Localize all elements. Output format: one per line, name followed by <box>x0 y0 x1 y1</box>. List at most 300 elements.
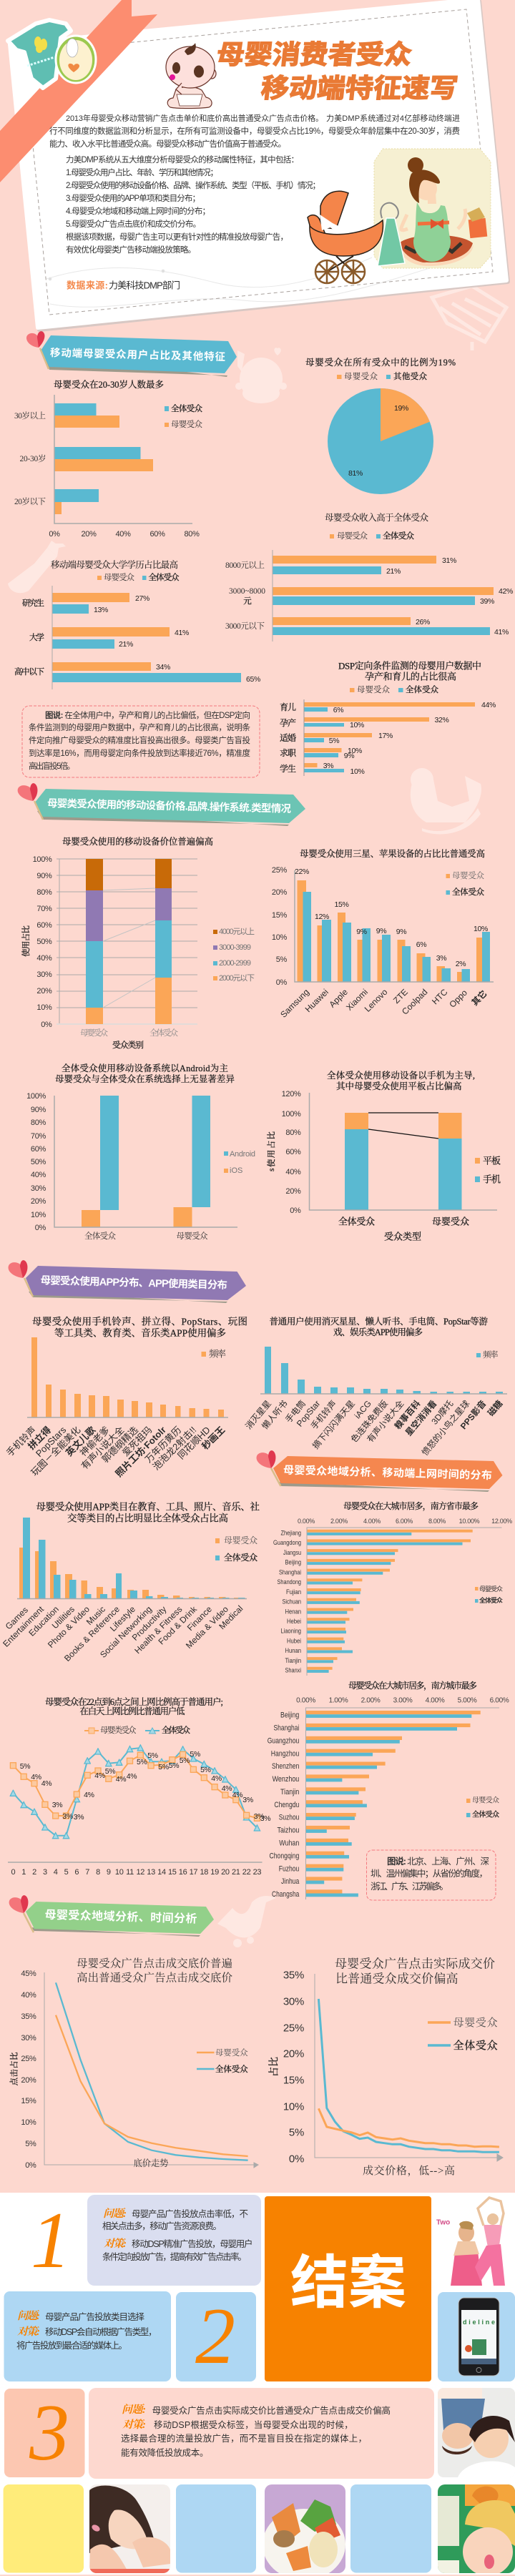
tile: problem 1: 母婴产品广告投放点击率低，不 <box>132 2208 248 2219</box>
y ticks: 40% <box>285 1168 301 1176</box>
y ticks: 0% <box>41 1021 52 1029</box>
data source: 力美科技DMP部门 <box>109 280 180 290</box>
intro text: 2.母婴受众使用的移动设备价格、品牌、操作系统、类型（平板、手机）情况； <box>66 180 320 190</box>
province labels: Guangdong <box>273 1539 301 1547</box>
callout: DSP note: 条件监测到的母婴用户数据中，孕产和育儿的占比很高，说明条 <box>29 722 250 732</box>
legend: 3000-3999 <box>219 943 251 952</box>
chart title <box>269 1316 488 1337</box>
value labels <box>94 594 260 684</box>
intro text: 3.母婴受众使用的APP单项和类目分布； <box>66 193 200 203</box>
tile: result: 结案 <box>290 2251 406 2316</box>
tile: numeral 3 <box>4 2389 84 2477</box>
value labels: 65% <box>246 675 260 684</box>
chart title: 母婴受众使用三星、苹果设备的占比比普通受高 <box>300 848 485 859</box>
chart title: 母婴受众在大城市居多，南方省市最多 <box>343 1500 479 1511</box>
value labels: 10% <box>348 747 362 755</box>
app labels: 有声小说大全 <box>365 1398 406 1445</box>
y ticks: 25% <box>283 2022 304 2034</box>
axis ticks: 10.00% <box>459 1518 480 1525</box>
hour labels <box>11 1868 261 1877</box>
legend: 母婴受众 <box>453 2017 498 2029</box>
axis ticks: 0% <box>49 530 60 539</box>
y ticks: 15% <box>283 2074 304 2087</box>
axes and arrow <box>44 1972 258 2168</box>
value labels: 4% <box>84 1791 94 1799</box>
y ticks: 20% <box>272 888 288 897</box>
category labels: 学生 <box>280 763 296 774</box>
legend: 母婴受众 <box>472 1795 499 1805</box>
banner text: 母婴受众地域分析、移动端上网时间的分布 <box>283 1464 492 1482</box>
category labels: 元 <box>243 596 252 606</box>
chart title: 母婴受众与全体受众在系统选择上无显著差异 <box>55 1073 235 1084</box>
y ticks: 40% <box>31 1171 46 1179</box>
axis ticks <box>296 1696 509 1705</box>
y ticks: 90% <box>31 1106 46 1114</box>
series lines <box>368 1113 438 1139</box>
value labels: 3% <box>260 1814 270 1823</box>
category labels: Media & Video <box>184 1604 230 1651</box>
illustration: mother panel <box>374 149 491 268</box>
x labels: 母婴受众 <box>80 1028 109 1038</box>
x labels: 全体受众 <box>84 1231 116 1241</box>
tile: result <box>265 2196 431 2381</box>
legend: 母婴受众 <box>104 572 134 582</box>
value labels: 9% <box>376 927 386 935</box>
axis ticks: 4.00% <box>426 1696 445 1705</box>
chart title <box>338 661 481 682</box>
x labels: 受众类型 <box>384 1232 421 1242</box>
chart title <box>55 1063 235 1084</box>
tile: problem 2: 问题: <box>17 2310 40 2322</box>
app labels: PopStars <box>34 1424 69 1459</box>
axis <box>272 550 273 641</box>
axis ticks: 6.00% <box>396 1518 413 1525</box>
conclusion section background <box>0 2193 515 2575</box>
tile: numeral 2 <box>176 2292 256 2381</box>
axis <box>27 1417 228 1418</box>
app labels: 神偷老爹 <box>78 1425 112 1458</box>
legend: 母婴类受众 <box>100 1725 137 1735</box>
intro text: 有效优化母婴类广告移动端投放策略。 <box>66 245 196 255</box>
axes <box>309 1093 497 1210</box>
city labels: Taizhou <box>278 1827 299 1835</box>
y ticks: 0% <box>35 1224 46 1232</box>
legend: 全体受众 <box>149 572 180 582</box>
chart: floor price <box>9 1957 258 2170</box>
legend <box>213 927 255 983</box>
hour labels: 12 <box>136 1868 144 1877</box>
y ticks: 100% <box>282 1110 301 1119</box>
x axis title: 底价走势 <box>133 2158 169 2168</box>
axis ticks: 20% <box>81 530 97 539</box>
legend: 2000元以下 <box>219 974 255 983</box>
axis ticks: 3.00% <box>393 1696 413 1705</box>
hour labels: 5 <box>64 1868 69 1877</box>
city labels: Wuhan <box>279 1839 299 1848</box>
category labels: Medical <box>217 1603 245 1631</box>
intro text: 5.母婴受众广告点击底价和成交价分布。 <box>66 219 201 229</box>
city labels: Hangzhou <box>271 1749 299 1758</box>
chart: pie share <box>305 357 456 494</box>
category labels: 孕产 <box>280 717 296 728</box>
chart: device price stacked <box>21 836 255 1050</box>
value labels: 13% <box>94 606 108 614</box>
legend: iOS <box>230 1166 242 1175</box>
axes and arrow <box>315 1974 503 2161</box>
tile: problem 2 <box>4 2291 171 2381</box>
app labels: 摘下闪闪满天星 <box>310 1398 357 1451</box>
x labels <box>80 1028 179 1050</box>
city labels <box>268 1711 300 1899</box>
category labels: Lifestyle <box>108 1604 137 1633</box>
section banner 4 <box>257 1450 502 1492</box>
hour labels: 11 <box>126 1868 134 1877</box>
icon: heart pin <box>9 1260 33 1297</box>
legend <box>476 1350 499 1360</box>
hour labels: 19 <box>210 1868 219 1877</box>
banner text: 母婴类受众使用的移动设备价格.品牌.操作系统.类型情况 <box>47 797 292 815</box>
chart title: 母婴受众在22点到6点之间上网比例高于普通用户; <box>45 1696 223 1707</box>
banner shape <box>41 335 237 373</box>
main title <box>215 39 459 103</box>
value labels: 34% <box>156 663 170 672</box>
y ticks: 20% <box>21 2076 36 2085</box>
axis ticks: 4.00% <box>363 1518 381 1525</box>
y ticks: 60% <box>36 921 52 930</box>
value labels: 6% <box>333 706 343 714</box>
legend: 平板 <box>483 1156 501 1166</box>
app labels: 郭德纲精选 <box>99 1425 140 1465</box>
banner shadow <box>278 1482 489 1492</box>
y ticks: 20% <box>285 1187 301 1196</box>
legend <box>350 684 439 694</box>
legend: 全体受众 <box>171 403 203 413</box>
legend <box>84 1725 190 1735</box>
city labels: Chongqing <box>269 1852 299 1860</box>
y ticks: 10% <box>272 933 288 942</box>
value labels: 5% <box>158 1763 169 1771</box>
bars <box>82 1096 210 1227</box>
chart: device type <box>266 1070 501 1242</box>
province labels: Sichuan <box>282 1598 301 1606</box>
axis ticks: 0.00% <box>298 1518 315 1525</box>
photo: food plate <box>263 2484 345 2576</box>
value labels: 27% <box>135 594 149 603</box>
province labels: Zhejiang <box>280 1529 301 1538</box>
chart title <box>32 1316 247 1339</box>
tile: yellow <box>4 2484 84 2573</box>
chart title: 普通用户使用消灭星星、懒人听书、手电筒、PopStar等游 <box>269 1316 488 1327</box>
city labels: Chengdu <box>274 1801 299 1809</box>
x labels: 母婴受众 <box>432 1216 469 1227</box>
chart title <box>335 1957 495 1985</box>
intro text: 能力、收入水平比普通受众高。母婴受众移动广告价值高于普通受众。 <box>49 139 286 149</box>
y ticks: 100% <box>26 1092 46 1101</box>
icon: heart pin <box>26 331 49 369</box>
bars <box>31 1337 224 1417</box>
dashed border <box>31 9 493 315</box>
value labels: 5% <box>169 1761 179 1770</box>
value labels: 26% <box>416 618 430 626</box>
app labels: 照片工坊·Fotolr <box>113 1425 168 1479</box>
value labels: 3% <box>52 1801 62 1809</box>
category labels: 8000元以上 <box>225 560 265 570</box>
category labels: Food & Drink <box>157 1603 200 1646</box>
x labels: Huawei <box>303 987 330 1014</box>
y ticks <box>21 1970 36 2170</box>
section banner 3 <box>9 1260 246 1303</box>
tile: problem 1: 条件定向投放广告，提高有效广告点击率。 <box>102 2251 247 2262</box>
legend: 全体受众 <box>472 1809 499 1819</box>
chart title: 母婴受众在20-30岁人数最多 <box>54 379 164 390</box>
chart: app categories <box>1 1500 260 1663</box>
category labels: Music <box>84 1604 107 1627</box>
bars <box>304 702 475 772</box>
callout: region note: 浙江、广东、江苏偏多。 <box>371 1881 448 1892</box>
value labels: 42% <box>499 587 513 596</box>
category labels: 高中以下 <box>14 667 44 677</box>
hour labels: 15 <box>168 1868 177 1877</box>
y ticks: 10% <box>283 2101 304 2113</box>
hour labels: 1 <box>21 1868 26 1877</box>
bars <box>52 593 241 682</box>
chart title: 孕产和育儿的占比很高 <box>365 671 456 682</box>
axis ticks: 8.00% <box>428 1518 446 1525</box>
callout: DSP note: 图说: 在全体用户中，孕产和育儿的占比偏低，但在DSP定向 <box>45 710 250 720</box>
icon: baby onesie <box>8 20 71 88</box>
y ticks: 45% <box>21 1970 36 1978</box>
callout: DSP note: 高出盲投5倍。 <box>29 761 75 771</box>
province labels: Hubei <box>287 1637 301 1645</box>
value labels: 10% <box>474 925 488 933</box>
legend: 全体受众 <box>215 2064 248 2074</box>
category labels: 适婚 <box>280 732 296 743</box>
axis ticks <box>49 530 200 539</box>
y ticks: 40% <box>21 1991 36 2000</box>
value labels: 5% <box>20 1762 30 1771</box>
value labels: 4% <box>116 1775 126 1784</box>
tile: problem 1: 相关点击多，移动广告资源浪费。 <box>102 2221 222 2231</box>
tile: problem 3: 能有效降低投放成本。 <box>121 2447 209 2458</box>
value labels: 5% <box>180 1756 190 1765</box>
axis ticks: 5.00% <box>458 1696 477 1705</box>
section banner 1 <box>26 331 237 377</box>
line series <box>318 1999 499 2152</box>
chart title: 等工具类、教育类、音乐类APP使用偏多 <box>54 1327 226 1339</box>
y ticks: 5% <box>289 2127 304 2138</box>
bars <box>19 1518 245 1598</box>
x labels: Samsung <box>278 987 311 1020</box>
watermark: bottle <box>8 541 66 593</box>
axis ticks: 6.00% <box>490 1696 509 1705</box>
chart title: 在白天上网比例比普通用户低 <box>80 1706 185 1716</box>
axes <box>306 1708 499 1899</box>
x labels: Xiaomi <box>344 987 370 1013</box>
value labels: 6% <box>416 940 426 949</box>
x labels: 全体受众 <box>149 1028 179 1038</box>
value labels: 4% <box>31 1773 41 1781</box>
chart: provinces <box>273 1500 512 1676</box>
legend <box>475 1156 501 1184</box>
intro text: 根据该项数据，母婴广告主可以更有针对性的精准投放母婴广告， <box>66 232 288 242</box>
bars <box>265 1347 503 1394</box>
card body <box>10 0 506 328</box>
chart title: 母婴受众使用APP类目在教育、工具、照片、音乐、社 <box>36 1500 260 1512</box>
x labels <box>278 987 489 1020</box>
category labels: Games <box>4 1605 30 1631</box>
app labels: 手机铃声 <box>308 1398 338 1431</box>
app labels: 懒人听书 <box>260 1399 290 1431</box>
chart title <box>327 1070 475 1091</box>
province labels: Henan <box>285 1608 301 1616</box>
axis <box>52 586 53 689</box>
axes <box>295 870 494 982</box>
hour labels: 10 <box>115 1868 124 1877</box>
intro text: 行不同维度的数据监测和分析显示，在所有可监测设备中，母婴受众占比19%，母婴受众年龄层集中在20-30岁，消费 <box>49 126 460 136</box>
app labels: 愤怒的小鸟之星球 <box>419 1398 471 1457</box>
hour labels: 20 <box>221 1868 230 1877</box>
icon: baby <box>166 43 216 109</box>
value labels: 39% <box>480 597 494 606</box>
chart title: 高出普通受众广告点击成交底价 <box>77 1971 232 1984</box>
x labels: Oppo <box>447 988 469 1010</box>
y axis title: s使用占比 <box>266 1131 276 1171</box>
axis ticks: 1.00% <box>329 1696 348 1705</box>
y ticks: 15% <box>272 911 288 920</box>
x labels <box>338 1216 469 1242</box>
app labels: PopStar <box>295 1398 322 1429</box>
category labels: 求职 <box>280 747 297 758</box>
y ticks: 35% <box>283 1970 304 1981</box>
axis ticks: 60% <box>149 530 165 539</box>
legend: 全体受众 <box>162 1725 190 1735</box>
legend: 手机 <box>483 1174 501 1184</box>
axis ticks: 40% <box>115 530 131 539</box>
y ticks: 0% <box>289 2153 304 2165</box>
ribbon <box>0 0 157 182</box>
city labels: Tianjin <box>280 1788 299 1796</box>
watermark: stroller <box>217 1896 276 1947</box>
chart: all audience apps <box>243 1316 507 1457</box>
icon: heart pin <box>9 1895 34 1932</box>
legend: 全体受众 <box>453 2040 498 2052</box>
chart title <box>77 1957 232 1984</box>
app labels: PPS影音 <box>458 1398 488 1431</box>
title line 2: 移动端特征速写 <box>260 73 459 103</box>
bars <box>345 1113 462 1210</box>
app labels: 星空消消看 <box>403 1398 438 1437</box>
value labels: 22% <box>295 867 309 876</box>
value labels: 5% <box>147 1751 158 1760</box>
intro text: 4.母婴受众地域和移动端上网时间的分布； <box>66 206 210 216</box>
hour labels: 9 <box>107 1868 111 1877</box>
y ticks: 35% <box>21 2012 36 2021</box>
value labels: 2% <box>456 960 466 968</box>
chart title: 母婴受众广告点击实际成交价 <box>335 1957 495 1971</box>
y ticks: 10% <box>31 1211 46 1219</box>
app labels: 手机铃声 <box>4 1425 38 1458</box>
tile: blue A <box>176 2484 256 2573</box>
value labels: 41% <box>175 629 189 637</box>
line series <box>56 1982 248 2160</box>
city labels: Changsha <box>272 1890 300 1899</box>
hour labels: 2 <box>32 1868 36 1877</box>
y ticks: 5% <box>25 2140 36 2148</box>
icon: heart pin <box>18 783 43 820</box>
category labels: 20岁以下 <box>14 496 46 506</box>
x labels: 全体受众 <box>338 1216 375 1227</box>
legend: 全体受众 <box>224 1552 258 1563</box>
chart title: 母婴受众收入高于全体受众 <box>325 512 428 523</box>
intro text <box>49 113 460 255</box>
hour labels: 6 <box>74 1868 79 1877</box>
banner shadow <box>29 1292 227 1303</box>
y ticks: 50% <box>31 1158 46 1166</box>
y ticks: 60% <box>31 1145 46 1154</box>
legend: 母婴受众 <box>224 1535 258 1545</box>
data source: 数据来源: <box>67 280 108 290</box>
y ticks: 50% <box>36 938 52 946</box>
callout: region note: 圳、温州偏集中；从省份的角度， <box>371 1868 488 1879</box>
y ticks: 30% <box>36 970 52 979</box>
x labels: HTC <box>430 987 450 1006</box>
value labels: 3% <box>254 1812 264 1821</box>
banner shape <box>26 1266 246 1300</box>
category labels: 大学 <box>29 632 44 642</box>
banner shape <box>26 1902 214 1934</box>
y ticks: 80% <box>285 1129 301 1137</box>
value labels: 9% <box>396 928 406 936</box>
app labels: 3D摩托 <box>429 1398 455 1427</box>
value labels <box>386 556 513 636</box>
legend: 全体受众 <box>479 1596 503 1604</box>
category labels <box>280 702 297 774</box>
callout: DSP note <box>22 706 260 777</box>
banner shape <box>273 1456 502 1489</box>
category labels: 研究生 <box>22 598 44 608</box>
y ticks: 90% <box>36 872 52 880</box>
axis ticks: 12.00% <box>491 1518 512 1525</box>
app labels: 玩图－全能美化 <box>29 1425 82 1478</box>
app labels: 爱死祖玛 <box>120 1425 154 1458</box>
x axis title: 成交价格，低-->高 <box>363 2164 455 2177</box>
chart title: 戏、娱乐类APP使用偏多 <box>333 1327 423 1337</box>
app labels: 有声小说大全 <box>79 1425 126 1471</box>
value labels <box>20 1750 270 1823</box>
value labels: 4% <box>41 1779 52 1788</box>
legend: 全体受众 <box>383 531 415 541</box>
city labels: Guangzhou <box>268 1736 299 1745</box>
axis ticks: 2.00% <box>361 1696 381 1705</box>
legend: 4000元以上 <box>219 927 255 936</box>
x labels: Lenovo <box>363 987 390 1014</box>
app labels: 英文儿歌 <box>64 1425 97 1458</box>
grid <box>57 859 197 1024</box>
value labels: 5% <box>329 737 339 745</box>
legend <box>337 371 428 381</box>
category labels: Utilities <box>50 1604 77 1631</box>
photo: baby in hat <box>438 2484 515 2576</box>
axis ticks <box>298 1518 512 1525</box>
axes <box>307 1528 502 1676</box>
axes <box>54 395 192 523</box>
chart: education <box>14 559 260 689</box>
value labels: 3% <box>242 1796 253 1804</box>
x labels: 受众类别 <box>112 1040 144 1050</box>
category labels <box>14 411 46 506</box>
y ticks <box>283 1970 304 2165</box>
app labels: 万年历黄历 <box>143 1425 183 1465</box>
